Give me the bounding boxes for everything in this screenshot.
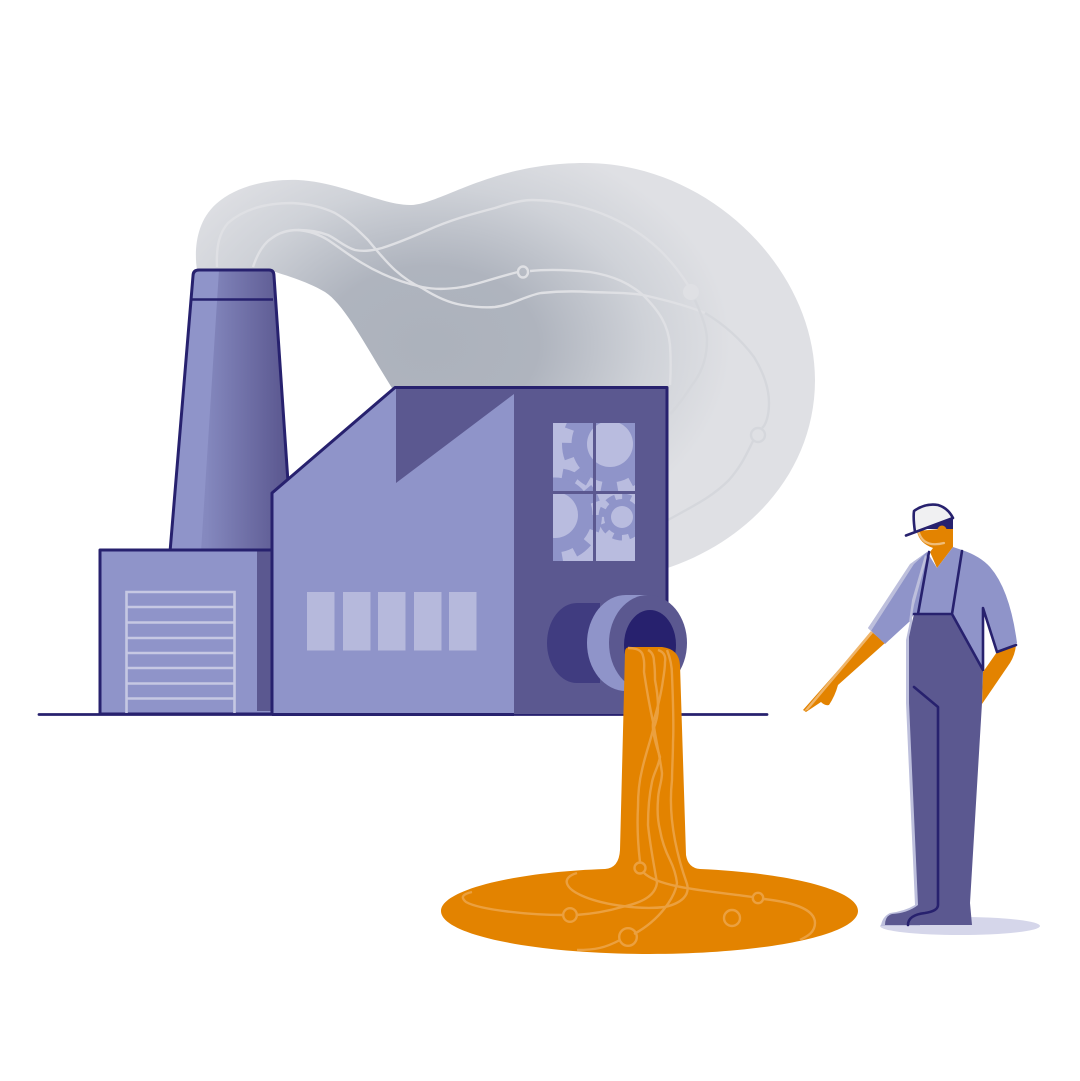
roller door <box>126 592 234 713</box>
discharge pipe <box>547 595 687 691</box>
sleeve highlight <box>868 553 927 631</box>
smoke cloud <box>196 163 815 572</box>
main factory building <box>272 387 667 714</box>
cap <box>906 505 953 536</box>
pointing arm <box>803 631 885 712</box>
smoke node <box>683 284 699 300</box>
overalls <box>881 551 1016 926</box>
waste liquid <box>441 647 858 954</box>
smoke lines, right side <box>668 300 769 520</box>
row of windows <box>307 592 476 650</box>
ground line <box>39 713 767 716</box>
smoke stream lines <box>217 200 705 385</box>
shirt <box>868 547 1017 672</box>
shed building <box>100 550 272 714</box>
resting arm <box>982 645 1016 704</box>
worker <box>803 505 1017 926</box>
chimney <box>170 270 293 552</box>
face and neck <box>917 528 953 568</box>
gear window <box>553 423 635 561</box>
worker shadow <box>880 917 1040 935</box>
liquid swirl lines <box>463 648 815 950</box>
illustration: factory polluting air and water <box>38 163 1040 954</box>
